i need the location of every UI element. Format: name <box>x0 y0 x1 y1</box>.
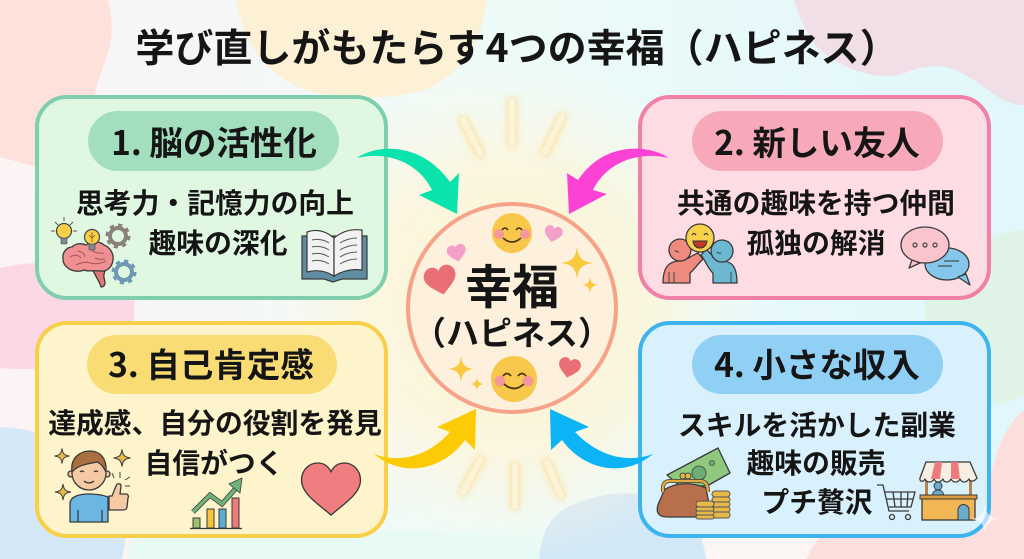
icon: person thumbs up with stars <box>54 448 130 522</box>
icon: shopping cart <box>877 485 915 520</box>
body text 4: 趣味の販売 <box>746 442 886 482</box>
heading pill 4: 4. 小さな収入 <box>714 338 920 387</box>
icon: brain with bulbs and gears <box>51 217 134 287</box>
body text 4: スキルを活かした副業 <box>678 404 956 444</box>
panel: 3 self-affirmation <box>37 323 386 536</box>
heading pill 3: 3. 自己肯定感 <box>108 338 314 387</box>
heading pill 4 <box>692 335 943 394</box>
heading pill 2 <box>692 111 943 171</box>
centre circle: happiness <box>408 204 616 412</box>
icon: speech bubbles <box>901 227 970 285</box>
title: 学び直しがもたらす4つの幸福（ハピネス） <box>135 18 899 74</box>
body text 2 <box>677 182 955 262</box>
body text 2: 共通の趣味を持つ仲間 <box>677 182 955 222</box>
body text 4: プチ贅沢 <box>761 481 873 521</box>
watermark sparkle <box>970 504 1000 534</box>
central glow <box>262 58 762 558</box>
icon: red heart <box>302 463 360 515</box>
icon: smiling face bottom <box>491 356 537 402</box>
icon: open book <box>302 230 367 282</box>
icon: three friends high five <box>663 224 737 283</box>
icon: smiling face top <box>492 213 532 253</box>
icon: sparkles <box>448 247 598 391</box>
body text 3: 自信がつく <box>144 442 284 482</box>
body text 3: 達成感、自分の役割を発見 <box>48 402 382 442</box>
arrow: blue from panel 4 <box>550 409 653 468</box>
body text 3 <box>48 402 382 482</box>
icon: rising bar chart <box>190 478 242 528</box>
arrow: yellow from panel 3 <box>374 409 476 468</box>
panel: 4 small income <box>640 323 989 536</box>
arrow: magenta from panel 2 <box>567 149 669 214</box>
heading pill 3 <box>87 335 337 394</box>
panel: 1 brain activation <box>37 97 386 298</box>
heading pill 1: 1. 脳の活性化 <box>111 116 317 165</box>
centre label <box>413 249 611 355</box>
arrow: teal from panel 1 <box>357 149 459 214</box>
icon: market stall <box>920 462 977 520</box>
icon: purse, banknote and coins <box>657 448 730 519</box>
body text 1: 趣味の深化 <box>148 222 288 262</box>
body text 4 <box>678 404 956 521</box>
centre label: 幸福 <box>465 249 559 318</box>
heading pill 1 <box>88 111 339 171</box>
sun rays <box>463 101 562 506</box>
body text 2: 孤独の解消 <box>746 222 886 262</box>
centre label: （ハピネス） <box>413 307 611 355</box>
body text 1: 思考力・記憶力の向上 <box>76 182 354 222</box>
body text 1 <box>76 182 354 262</box>
panel: 2 new friends <box>640 97 989 298</box>
heading pill 2: 2. 新しい友人 <box>714 116 920 165</box>
icon: hearts <box>422 224 582 380</box>
